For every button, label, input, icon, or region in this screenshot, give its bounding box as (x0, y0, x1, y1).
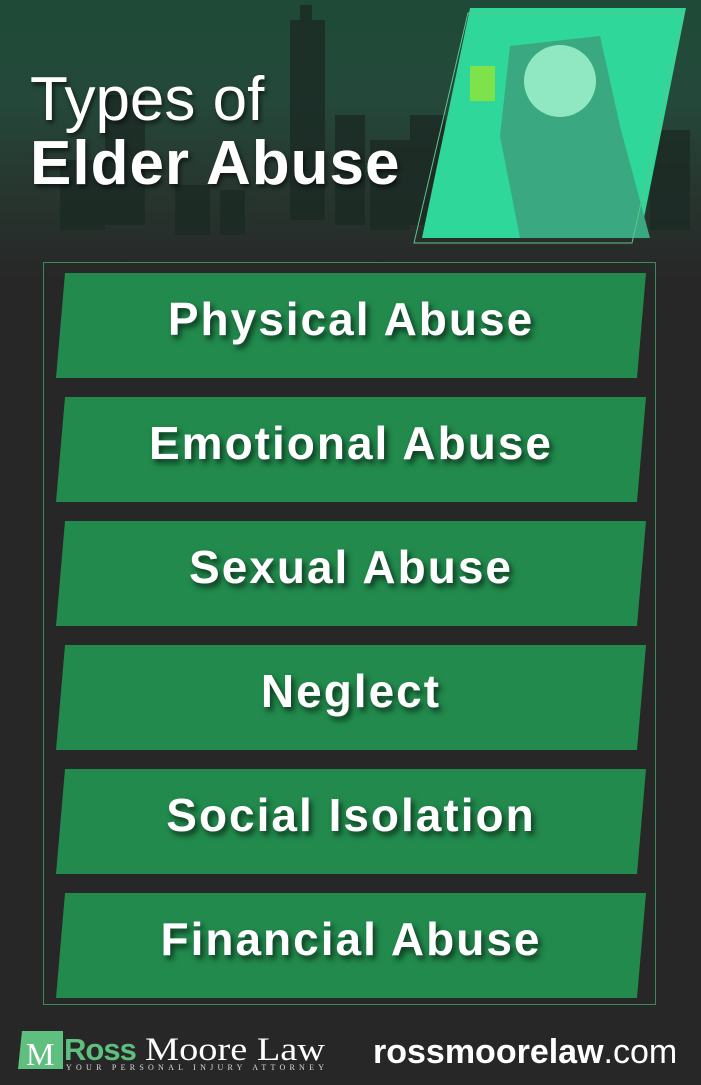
logo: Ross Moore Law: Ross (64, 1032, 136, 1067)
bar: Physical Abuse: Physical Abuse (168, 293, 534, 345)
website url: rossmoorelaw.com (373, 1033, 677, 1071)
logo: Ross Moore Law (18, 1031, 325, 1072)
bar: Neglect: Neglect (261, 665, 441, 717)
bar: Neglect (56, 645, 646, 750)
title: Elder Abuse (30, 129, 400, 198)
bar: Social Isolation (56, 769, 646, 874)
title: Types of (30, 65, 264, 134)
bar: Financial Abuse: Financial Abuse (160, 913, 542, 965)
bar: Emotional Abuse (56, 397, 646, 502)
logo: Ross Moore Law: YOUR PERSONAL INJURY ATTORNEY (66, 1063, 324, 1072)
bar: Emotional Abuse: Emotional Abuse (149, 417, 553, 469)
bar: Financial Abuse (56, 893, 646, 998)
panel: list of abuse types (43, 262, 656, 1005)
header background: city skyline (0, 0, 701, 280)
logo: Ross Moore Law: Moore Law (145, 1032, 325, 1068)
photo: elderly woman (413, 8, 686, 244)
bar: Sexual Abuse: Sexual Abuse (189, 541, 513, 593)
bar: Sexual Abuse (56, 521, 646, 626)
bar: Physical Abuse (56, 273, 646, 378)
bar: Social Isolation: Social Isolation (166, 789, 536, 841)
title (30, 65, 400, 198)
logo: Ross Moore Law: M (26, 1036, 54, 1072)
